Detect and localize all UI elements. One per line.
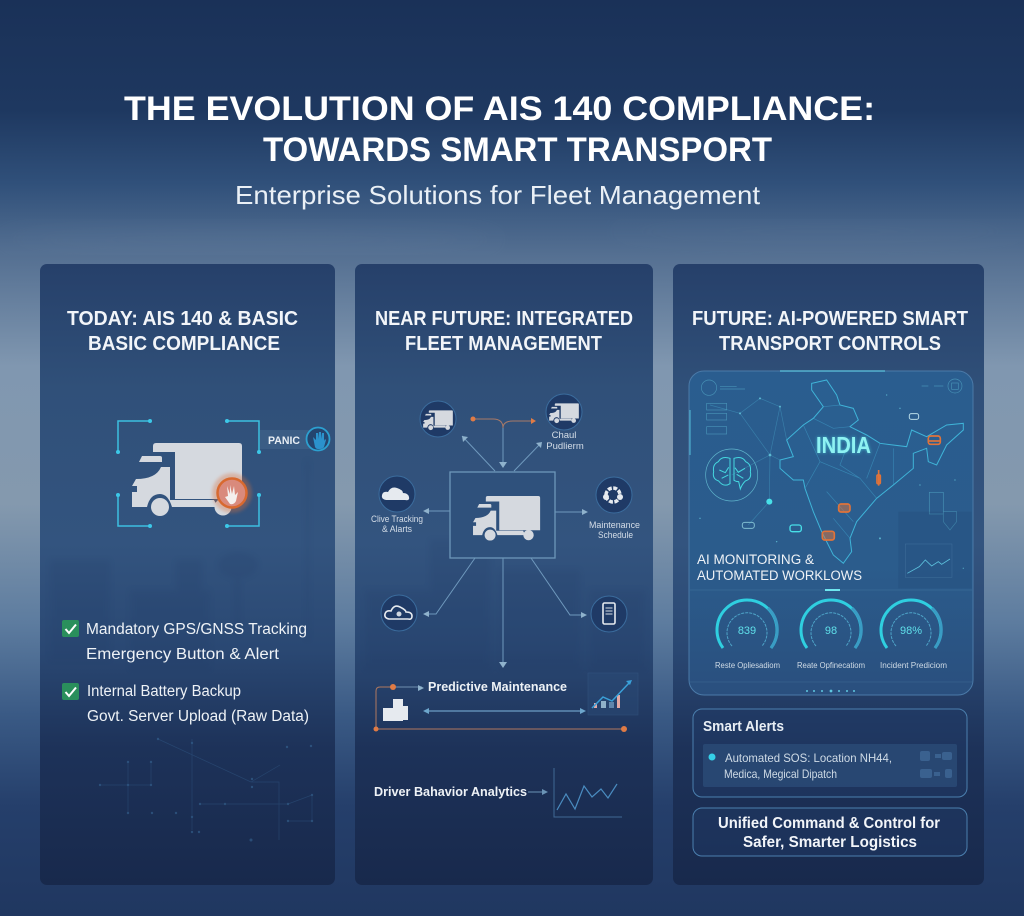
text: predictive maintenance: Predictive Maintenance <box>428 679 567 694</box>
closing callout: Safer, Smarter Logistics <box>743 834 917 851</box>
smart alerts <box>693 709 967 797</box>
city silhouette <box>365 540 645 670</box>
heading: BASIC COMPLIANCE <box>88 333 280 355</box>
panel: today <box>40 264 335 885</box>
node: maintenance: Schedule <box>598 530 633 541</box>
closing callout: Unified Command & Control for <box>718 815 940 832</box>
city silhouette <box>50 460 309 670</box>
gauge 1: 839 <box>738 625 756 637</box>
icon: tablet <box>591 596 627 632</box>
icon: truck node <box>420 401 456 437</box>
network decoration <box>99 738 313 842</box>
heading: NEAR FUTURE: INTEGRATED <box>375 308 633 330</box>
smart alerts: Medica, Megical Dipatch <box>724 767 837 781</box>
title <box>124 90 875 169</box>
dim chart <box>898 512 972 588</box>
heading <box>67 308 298 355</box>
gauge 3: Incident Prediciom <box>880 661 947 670</box>
gauge 3 <box>880 600 947 670</box>
driver analytics <box>374 768 622 817</box>
pager dots <box>806 690 855 692</box>
panel: future <box>673 264 984 885</box>
node: cloud platform: Chaul <box>552 430 576 441</box>
icon: check <box>62 620 79 637</box>
gauge 1 <box>715 600 780 670</box>
closing callout <box>693 808 967 856</box>
icon: cloud <box>381 595 417 631</box>
orange connector <box>470 416 536 428</box>
node: live tracking <box>371 476 423 535</box>
smart alerts: Smart Alerts <box>703 719 784 735</box>
hub box with truck <box>450 472 555 558</box>
text: battery: Internal Battery Backup <box>87 683 241 700</box>
text: battery <box>87 683 309 725</box>
icon: panic touch <box>212 473 252 513</box>
node: cloud platform: Pudlierm <box>546 441 584 452</box>
icon: documents <box>383 699 408 721</box>
heading <box>375 308 633 355</box>
icon: truck <box>132 443 242 516</box>
text: ai monitoring: AUTOMATED WORKLOWS <box>697 568 862 583</box>
dashboard <box>689 371 973 695</box>
node: live tracking: Clive Tracking <box>371 514 423 525</box>
text: tracking: Emergency Button & Alert <box>86 646 280 663</box>
title: TOWARDS SMART TRANSPORT <box>263 131 772 169</box>
background haze <box>0 222 1024 252</box>
predictive maintenance flow <box>374 673 638 732</box>
icon: scanning brackets <box>116 419 261 528</box>
gauge 2 <box>797 600 865 670</box>
panic button <box>260 428 330 450</box>
chart: driver behaviour <box>554 768 622 817</box>
arrows from hub <box>423 425 588 668</box>
vehicles <box>822 436 940 540</box>
heading: TRANSPORT CONTROLS <box>719 333 941 355</box>
heading <box>692 308 968 355</box>
node: live tracking: & Alarts <box>382 524 412 535</box>
chart: trend <box>588 673 638 715</box>
heading: FLEET MANAGEMENT <box>405 333 602 355</box>
panic button: PANIC <box>268 435 300 447</box>
heading: TODAY: AIS 140 & BASIC <box>67 308 298 330</box>
gauge 3: 98% <box>900 625 922 637</box>
map: india <box>699 379 972 588</box>
smart alerts: Automated SOS: Location NH44, <box>725 751 892 765</box>
gauge 1: Reste Opliesadiom <box>715 661 780 670</box>
text: battery: Govt. Server Upload (Raw Data) <box>87 708 309 725</box>
icon: check <box>62 683 79 700</box>
map label: india: INDIA <box>816 432 871 458</box>
icon: brain <box>706 449 758 501</box>
heading: FUTURE: AI-POWERED SMART <box>692 308 968 330</box>
network <box>710 398 787 525</box>
subtitle: Enterprise Solutions for Fleet Management <box>235 180 761 210</box>
title: THE EVOLUTION OF AIS 140 COMPLIANCE: <box>124 90 875 128</box>
node: cloud platform <box>546 394 584 452</box>
text: tracking: Mandatory GPS/GNSS Tracking <box>86 621 307 638</box>
map label: india: INDIA <box>816 432 871 458</box>
gauge 2: Reate Opfinecatiom <box>797 661 865 670</box>
text: ai monitoring: AI MONITORING & <box>697 552 814 567</box>
gauge 2: 98 <box>825 625 837 637</box>
checklist <box>62 620 309 725</box>
text: tracking <box>86 621 307 663</box>
driver analytics: Driver Bahavior Analytics <box>374 785 527 799</box>
hud icons <box>701 379 962 530</box>
node: maintenance: Maintenance <box>589 520 640 531</box>
node: maintenance <box>589 477 640 541</box>
text: ai monitoring <box>697 552 862 583</box>
panel: near future <box>355 264 653 885</box>
